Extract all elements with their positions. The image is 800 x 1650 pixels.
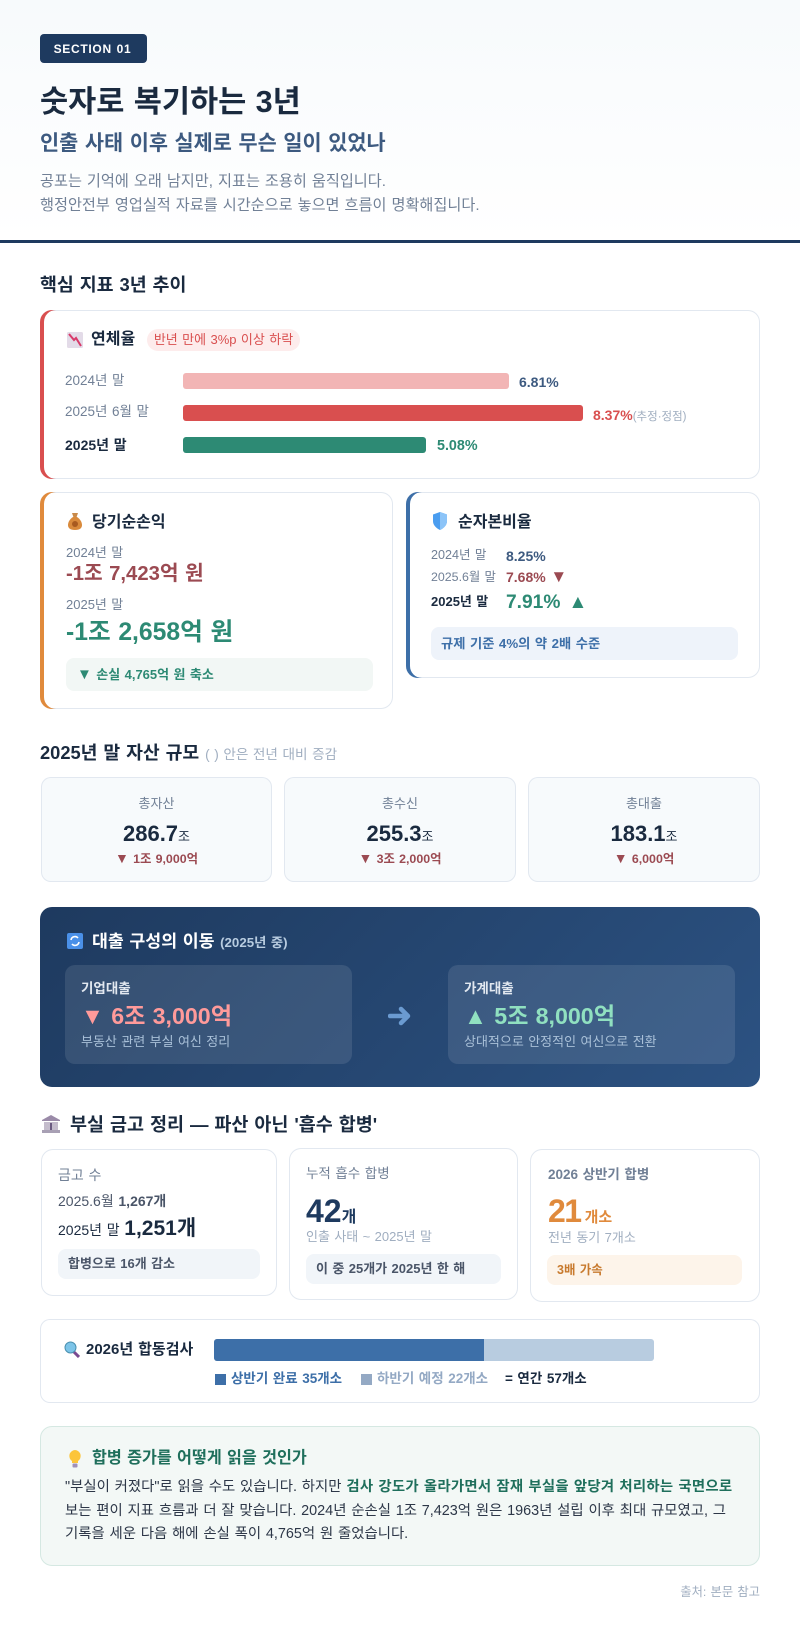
card: cumulative mergers: 누적 흡수 합병 bbox=[306, 1166, 390, 1181]
intro text: 행정안전부 영업실적 자료를 시간순으로 놓으면 흐름이 명확해집니다. bbox=[40, 197, 480, 214]
card: first half 2026 mergers: 3배 가속 bbox=[557, 1263, 603, 1277]
legend: 상반기 완료 35개소 bbox=[231, 1371, 342, 1386]
panel title: 대출 구성의 이동 (2025년 중) bbox=[92, 931, 288, 951]
card: number of credit unions: 2025년 말 1,251개 bbox=[58, 1217, 196, 1240]
legend bbox=[215, 1371, 587, 1386]
2024 value group: -1조 7,423억 원 bbox=[66, 563, 204, 585]
card: household loans bbox=[448, 965, 735, 1064]
card: corporate loans: 기업대출 bbox=[81, 981, 131, 996]
card: cumulative mergers: 42개 bbox=[306, 1193, 356, 1229]
row: 2024: 8.25% bbox=[506, 548, 546, 564]
note: regulation bbox=[431, 627, 738, 660]
bar row: 2025 June: 8.37%(추정·정점) bbox=[593, 407, 687, 423]
bar row: 2025 June: 2025년 6월 말 bbox=[65, 404, 149, 419]
note: loss reduced: ▼ 손실 4,765억 원 축소 bbox=[77, 666, 214, 683]
note: regulation: 규제 기준 4%의 약 2배 수준 bbox=[441, 636, 600, 651]
card: total assets: 286.7조 bbox=[123, 821, 190, 846]
callout: how to read the mergers bbox=[40, 1426, 760, 1566]
panel title: 연체율 bbox=[91, 331, 135, 348]
2024 value group bbox=[66, 545, 204, 585]
bar row: 2024: 6.81% bbox=[519, 374, 559, 390]
panel: delinquency rate bbox=[40, 310, 760, 479]
legend: 하반기 예정 22개소 bbox=[377, 1371, 488, 1386]
2025 value group: -1조 2,658억 원 bbox=[66, 619, 233, 646]
row: 2025 end: 2025년 말 bbox=[431, 594, 488, 609]
heading: weak credit unions: 부실 금고 정리 — 파산 아닌 '흡수 합병' bbox=[70, 1114, 377, 1135]
row: 2025 June bbox=[431, 567, 567, 586]
card: first half 2026 mergers: 21 개소 bbox=[548, 1193, 612, 1229]
2025 value group: 2025년 말 bbox=[66, 597, 123, 612]
card: total deposits: 255.3조 bbox=[366, 821, 434, 846]
icon: falling chart bbox=[67, 332, 83, 348]
card: total deposits bbox=[284, 777, 516, 882]
heading: asset scale: 2025년 말 자산 규모 ( ) 안은 전년 대비 증감 bbox=[40, 742, 337, 763]
callout body: 기록을 세운 다음 해에 손실 폭이 4,765억 원 줄었습니다. bbox=[65, 1526, 408, 1542]
card: total loans: 183.1조 bbox=[610, 821, 678, 846]
title: 숫자로 복기하는 3년 bbox=[40, 85, 301, 119]
bar row: 2025 end bbox=[65, 437, 478, 454]
2024 value group: 2024년 말 bbox=[66, 545, 123, 560]
card: total deposits: 총수신 bbox=[382, 796, 418, 811]
intro text: 공포는 기억에 오래 남지만, 지표는 조용히 움직입니다. bbox=[40, 173, 386, 190]
intro text bbox=[40, 173, 480, 214]
bar row: 2025 end: 5.08% bbox=[437, 438, 478, 454]
icon: shield bbox=[433, 512, 447, 530]
bar row: 2025 June bbox=[65, 404, 687, 423]
subtitle: 인출 사태 이후 실제로 무슨 일이 있었나 bbox=[40, 132, 386, 155]
stacked bar bbox=[214, 1339, 654, 1361]
2025 value group bbox=[66, 597, 233, 646]
panel: loan mix shift bbox=[40, 907, 760, 1087]
card: household loans: ▲ 5조 8,000억 bbox=[464, 1003, 615, 1029]
card: total assets bbox=[41, 777, 272, 882]
card: total loans bbox=[528, 777, 760, 882]
callout body: 보는 편이 지표 흐름과 더 잘 맞습니다. 2024년 순손실 1조 7,423억 원은 1963년 설립 이후 최대 규모였고, 그 bbox=[65, 1503, 726, 1519]
panel: net income bbox=[40, 492, 393, 709]
card: total assets: 총자산 bbox=[139, 796, 174, 811]
row: 2024: 2024년 말 bbox=[431, 548, 486, 562]
card: cumulative mergers bbox=[289, 1148, 518, 1300]
card: first half 2026 mergers: 전년 동기 7개소 bbox=[548, 1230, 636, 1245]
card: total loans: 총대출 bbox=[626, 796, 662, 811]
panel: joint inspection bbox=[40, 1319, 760, 1403]
card: household loans: 가계대출 bbox=[464, 981, 514, 996]
card: total loans: ▼ 6,000억 bbox=[614, 850, 674, 866]
row: 2025 end bbox=[431, 592, 587, 613]
card: number of credit unions bbox=[41, 1149, 277, 1296]
card: total assets: ▼ 1조 9,000억 bbox=[115, 850, 198, 866]
arrow bbox=[388, 1006, 410, 1026]
pill: drop note bbox=[147, 329, 300, 351]
note: loss reduced bbox=[66, 658, 373, 691]
card: first half 2026 mergers bbox=[530, 1149, 760, 1302]
icon: money bag bbox=[68, 513, 82, 530]
card: corporate loans: ▼ 6조 3,000억 bbox=[81, 1003, 232, 1029]
panel title: 순자본비율 bbox=[458, 514, 532, 531]
icon: magnifier bbox=[64, 1342, 80, 1358]
card: number of credit unions: 금고 수 bbox=[58, 1167, 101, 1183]
card: number of credit unions: 2025.6월 1,267개 bbox=[58, 1193, 166, 1209]
legend: = 연간 57개소 bbox=[505, 1371, 587, 1386]
card: total deposits: ▼ 3조 2,000억 bbox=[358, 850, 442, 866]
card: cumulative mergers: 이 중 25개가 2025년 한 해 bbox=[316, 1261, 465, 1276]
section badge bbox=[40, 34, 147, 63]
panel title: 2026년 합동검사 bbox=[86, 1341, 193, 1358]
row: 2025 June: 2025.6월 말 bbox=[431, 570, 496, 584]
card: number of credit unions: 합병으로 16개 감소 bbox=[68, 1256, 175, 1271]
bar row: 2025 end: 2025년 말 bbox=[65, 437, 127, 453]
panel title: 당기순손익 bbox=[92, 514, 166, 531]
icon: bank bbox=[42, 1115, 60, 1133]
pill: drop note: 반년 만에 3%p 이상 하락 bbox=[154, 332, 293, 347]
callout body bbox=[65, 1478, 732, 1542]
card: corporate loans bbox=[65, 965, 352, 1064]
icon: refresh bbox=[67, 933, 83, 949]
callout title: 합병 증가를 어떻게 읽을 것인가 bbox=[92, 1449, 307, 1467]
card: cumulative mergers: 인출 사태 ~ 2025년 말 bbox=[306, 1229, 432, 1244]
bar row: 2024 bbox=[65, 373, 559, 390]
source note: 출처: 본문 참고 bbox=[680, 1585, 760, 1599]
card: corporate loans: 부동산 관련 부실 여신 정리 bbox=[81, 1034, 230, 1049]
header bbox=[0, 0, 800, 243]
panel: capital ratio bbox=[406, 492, 760, 678]
row: 2024 bbox=[431, 548, 546, 564]
heading: key indicators: 핵심 지표 3년 추이 bbox=[40, 274, 186, 295]
row: 2025 June: 7.68% ▼ bbox=[506, 567, 567, 586]
row: 2025 end: 7.91% ▲ bbox=[506, 592, 587, 613]
card: first half 2026 mergers: 2026 상반기 합병 bbox=[548, 1167, 649, 1182]
bar row: 2024: 2024년 말 bbox=[65, 373, 124, 388]
icon: light bulb bbox=[69, 1450, 81, 1468]
card: household loans: 상대적으로 안정적인 여신으로 전환 bbox=[464, 1034, 657, 1049]
callout body: "부실이 커졌다"로 읽을 수도 있습니다. 하지만 검사 강도가 올라가면서 잠재 부실을 앞당겨 처리하는 국면으로 bbox=[65, 1479, 732, 1495]
section badge: SECTION 01 bbox=[54, 42, 131, 56]
